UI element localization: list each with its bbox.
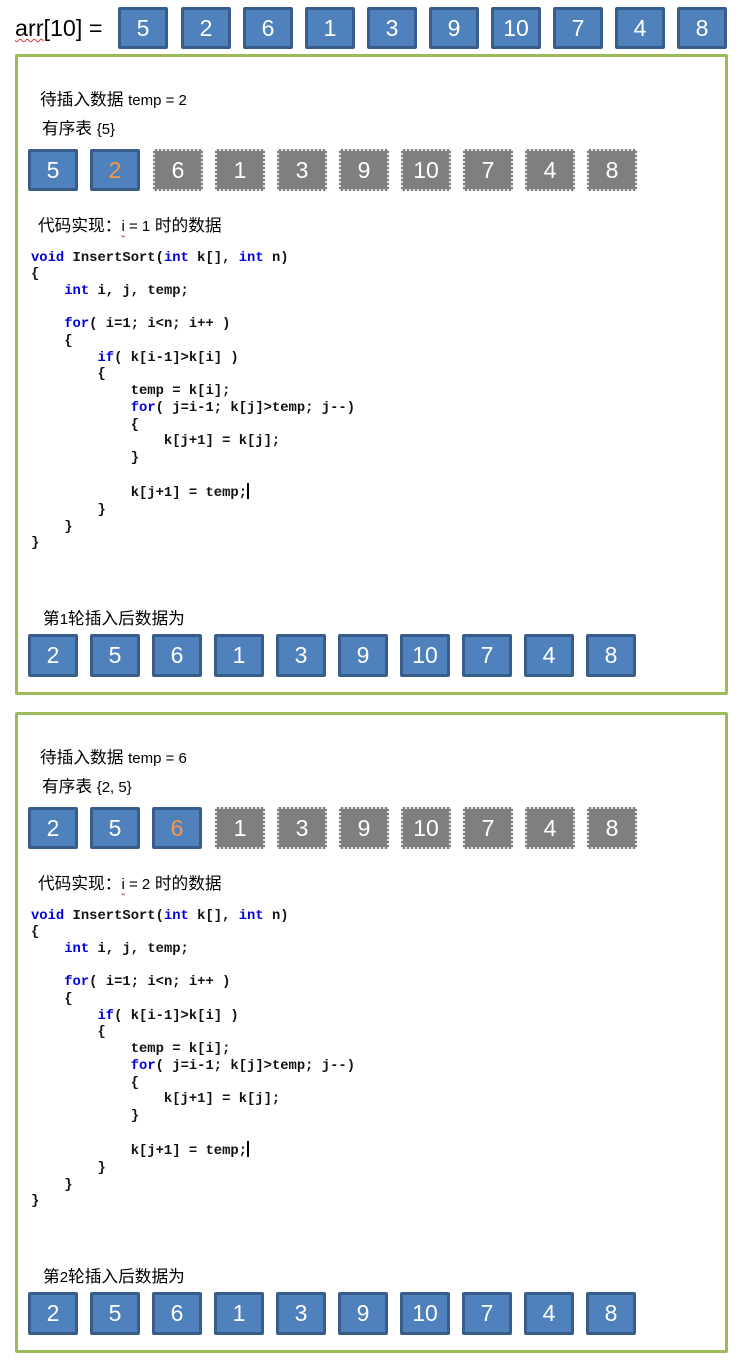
array state before insertion: 6 bbox=[171, 815, 183, 841]
array state after insertion bbox=[28, 1292, 636, 1335]
array state after insertion: 1 bbox=[233, 642, 245, 668]
array state before insertion: 7 bbox=[482, 815, 494, 841]
array state after insertion: 8 bbox=[605, 642, 617, 668]
panel: round 2 bbox=[15, 712, 728, 1353]
top array row: 5 bbox=[137, 15, 149, 41]
array state after insertion: 10 bbox=[412, 1300, 438, 1326]
array state before insertion: 7 bbox=[482, 157, 494, 183]
array state before insertion: 9 bbox=[358, 157, 370, 183]
array state after insertion: 8 bbox=[605, 1300, 617, 1326]
text: value to insert: 待插入数据 temp = 6 bbox=[40, 748, 187, 767]
array state after insertion: 9 bbox=[357, 642, 369, 668]
array state before insertion: 1 bbox=[234, 157, 246, 183]
array state before insertion: 4 bbox=[544, 815, 556, 841]
top array row: 8 bbox=[696, 15, 708, 41]
text: code caption: 代码实现：i = 2 时的数据 bbox=[38, 874, 222, 893]
array state before insertion bbox=[28, 149, 637, 191]
top array row: 3 bbox=[386, 15, 398, 41]
array state before insertion: 2 bbox=[47, 815, 59, 841]
top array row: 7 bbox=[572, 15, 584, 41]
text: sorted list: 有序表 {5} bbox=[42, 119, 115, 138]
top array row: 1 bbox=[324, 15, 336, 41]
array state after insertion: 3 bbox=[295, 642, 307, 668]
top array row: 9 bbox=[448, 15, 460, 41]
array state before insertion: 10 bbox=[413, 815, 439, 841]
text: code caption: 代码实现：i = 1 时的数据 bbox=[38, 216, 222, 235]
array state after insertion: 7 bbox=[481, 1300, 493, 1326]
top array row: 2 bbox=[200, 15, 212, 41]
array state after insertion: 10 bbox=[412, 642, 438, 668]
array state before insertion: 10 bbox=[413, 157, 439, 183]
panel: round 1 bbox=[15, 54, 728, 695]
top array row: 10 bbox=[503, 15, 529, 41]
top array row: 6 bbox=[262, 15, 274, 41]
array state before insertion: 3 bbox=[296, 815, 308, 841]
heading: arr[10] label: arr[10] = bbox=[15, 15, 102, 41]
array state before insertion: 3 bbox=[296, 157, 308, 183]
array state before insertion bbox=[28, 807, 637, 849]
array state after insertion: 2 bbox=[47, 1300, 59, 1326]
top array row: 4 bbox=[634, 15, 646, 41]
array state after insertion: 6 bbox=[171, 1300, 183, 1326]
code block: void InsertSort(int k[], int n) { int i, j, temp; for( i=1; i<n; i++ ) { if( k[i-1]>k[i] ) { temp = k[i]; for( j=i-1; k[j]>temp; j--) { k[j+1] = k[j]; } k[j+1] = temp; } } } bbox=[31, 908, 355, 1209]
text: result caption: 第2轮插入后数据为 bbox=[43, 1267, 185, 1286]
array state after insertion: 2 bbox=[47, 642, 59, 668]
array state before insertion: 4 bbox=[544, 157, 556, 183]
array state after insertion: 9 bbox=[357, 1300, 369, 1326]
top array row bbox=[118, 7, 727, 49]
array state before insertion: 5 bbox=[47, 157, 59, 183]
text: value to insert: 待插入数据 temp = 2 bbox=[40, 90, 187, 109]
array state before insertion: 8 bbox=[606, 815, 618, 841]
array state after insertion: 1 bbox=[233, 1300, 245, 1326]
array state before insertion: 2 bbox=[109, 157, 121, 183]
array state after insertion: 7 bbox=[481, 642, 493, 668]
array state before insertion: 5 bbox=[109, 815, 121, 841]
code block: void InsertSort(int k[], int n) { int i, j, temp; for( i=1; i<n; i++ ) { if( k[i-1]>k[i] ) { temp = k[i]; for( j=i-1; k[j]>temp; j--) { k[j+1] = k[j]; } k[j+1] = temp; } } } bbox=[31, 250, 355, 551]
array state after insertion: 5 bbox=[109, 642, 121, 668]
array state after insertion: 4 bbox=[543, 642, 555, 668]
array state after insertion: 5 bbox=[109, 1300, 121, 1326]
text: sorted list: 有序表 {2, 5} bbox=[42, 777, 132, 796]
array state after insertion: 6 bbox=[171, 642, 183, 668]
array state before insertion: 1 bbox=[234, 815, 246, 841]
array state after insertion: 4 bbox=[543, 1300, 555, 1326]
array state after insertion: 3 bbox=[295, 1300, 307, 1326]
array state before insertion: 9 bbox=[358, 815, 370, 841]
array state before insertion: 8 bbox=[606, 157, 618, 183]
text: result caption: 第1轮插入后数据为 bbox=[43, 609, 185, 628]
array state before insertion: 6 bbox=[172, 157, 184, 183]
array state after insertion bbox=[28, 634, 636, 677]
